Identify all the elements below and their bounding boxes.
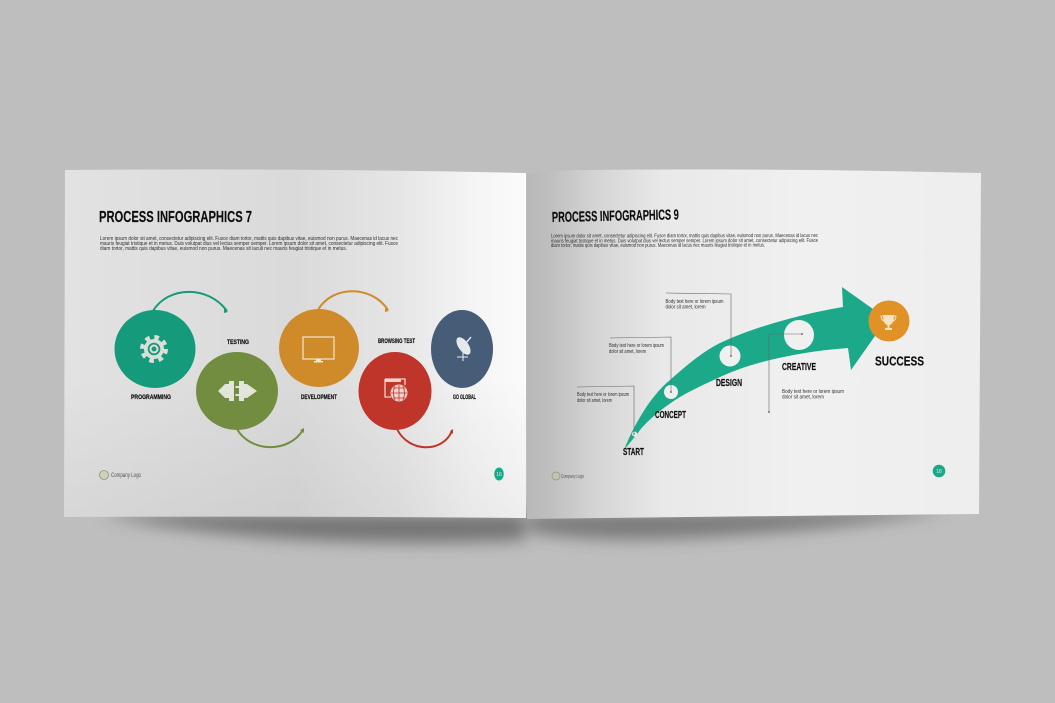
callout: creative — [782, 389, 844, 400]
title: process infographics 7: PROCESS INFOGRAPHICS 7 — [99, 209, 252, 226]
callout: creative: dolor sit amet, lorem — [782, 394, 824, 400]
body text: left page: mauris feugiat tristique et in metus. Duis volutpat dius vel lectus semper semper. Lorem ipsum dolor sit amet, consectetur adipiscing elit. Fusce — [100, 241, 398, 247]
icon: monitor — [303, 337, 334, 362]
body text: left page: Lorem ipsum dolor sit amet, consectetur adipiscing elit. Fusce diam tortor, mattis quis dapibus vitae, euismod non purus. Maecenas id lacus nec — [100, 236, 398, 242]
label: success: SUCCESS — [875, 354, 924, 368]
footer logo: left page: Company Logo — [111, 473, 141, 479]
page number: left page: 16 — [496, 472, 502, 478]
footer logo: right page: Company Logo — [561, 474, 584, 480]
body text: right page — [551, 233, 818, 249]
leader line: concept — [610, 337, 672, 393]
label: creative: CREATIVE — [782, 362, 816, 373]
body text: left page — [100, 236, 398, 252]
right page — [527, 169, 981, 519]
icon: browser globe — [385, 379, 408, 402]
label: programming: PROGRAMMING — [131, 394, 171, 401]
arc arrow: green — [153, 292, 227, 311]
milestone: concept — [664, 385, 678, 399]
label: browsing test: BROWSING TEST — [378, 338, 415, 345]
label: development: DEVELOPMENT — [301, 394, 337, 401]
milestone: creative — [784, 320, 814, 350]
callout: concept: dolor sit amet, lorem — [609, 349, 646, 355]
callout: start — [577, 392, 629, 404]
body text: right page: diam tortor, mattis quis dapibus vitae, euismod non purus. Maecenas id lacus nec mauris feugiat tristique et in metus. — [551, 243, 765, 249]
arc arrow: olive — [237, 429, 303, 447]
icon: trophy — [881, 315, 896, 330]
arc arrow tip: olive — [300, 428, 304, 433]
callout: concept: Body text here or lorem ipsum — [609, 343, 664, 349]
milestone: start — [632, 432, 637, 436]
step: testing — [196, 352, 278, 430]
milestone: design — [720, 346, 740, 366]
arc arrow: red — [397, 429, 452, 447]
arc arrow tip: red — [450, 429, 453, 434]
callout: creative: Body text here or lorem ipsum — [782, 389, 844, 395]
icon: satellite dish — [454, 335, 473, 361]
page number: left page — [494, 468, 504, 480]
growth arrow — [624, 287, 887, 450]
label: design: DESIGN — [716, 378, 742, 389]
page shadows — [100, 510, 950, 543]
success badge — [868, 300, 910, 342]
body text: right page: mauris feugiat tristique et in metus. Duis volutpat dius vel lectus semper semper. Lorem ipsum dolor sit amet, consectetur adipiscing elit. Fusce — [551, 238, 818, 244]
step: go global — [431, 310, 493, 388]
step: development — [279, 309, 359, 387]
step: programming — [114, 310, 196, 388]
label: testing: TESTING — [227, 339, 249, 346]
body text: right page: Lorem ipsum dolor sit amet, consectetur adipiscing elit. Fusce diam tortor, mattis quis dapibus vitae, euismod non purus. Maecenas id lacus nec — [551, 233, 818, 239]
label: start: START — [623, 447, 644, 458]
leader line: creative — [768, 333, 803, 413]
arc arrow tip: green — [224, 309, 228, 313]
callout: start: dolor sit amet, lorem — [577, 398, 612, 404]
leader line: start — [577, 386, 635, 435]
title: process infographics 9: PROCESS INFOGRAPHICS 9 — [552, 207, 679, 226]
label: concept: CONCEPT — [655, 410, 686, 421]
left page — [64, 169, 526, 518]
footer logo: left page — [100, 470, 141, 480]
callout: start: Body text here or lorem ipsum — [577, 392, 629, 398]
leader line: design — [666, 293, 732, 357]
footer logo: right page — [552, 472, 584, 480]
label: go global: GO GLOBAL — [453, 394, 476, 401]
arc arrow: orange — [318, 291, 388, 310]
arc arrow tip: orange — [385, 308, 389, 312]
page number: right page — [933, 465, 945, 477]
icon: plug connector — [218, 381, 257, 401]
callout: concept — [609, 343, 664, 355]
callout: design: Body text here or lorem ipsum — [666, 299, 724, 305]
icon: gear — [142, 338, 166, 360]
page number: right page: 18 — [936, 469, 942, 475]
body text: left page: diam tortor, mattis quis dapibus vitae, euismod non purus. Maecenas sit iaculi nec mauris feugiat tristique et in metus. — [100, 246, 347, 252]
step: browsing test — [358, 352, 432, 430]
callout: design: dolor sit amet, lorem — [666, 304, 706, 310]
callout: design — [666, 299, 724, 310]
